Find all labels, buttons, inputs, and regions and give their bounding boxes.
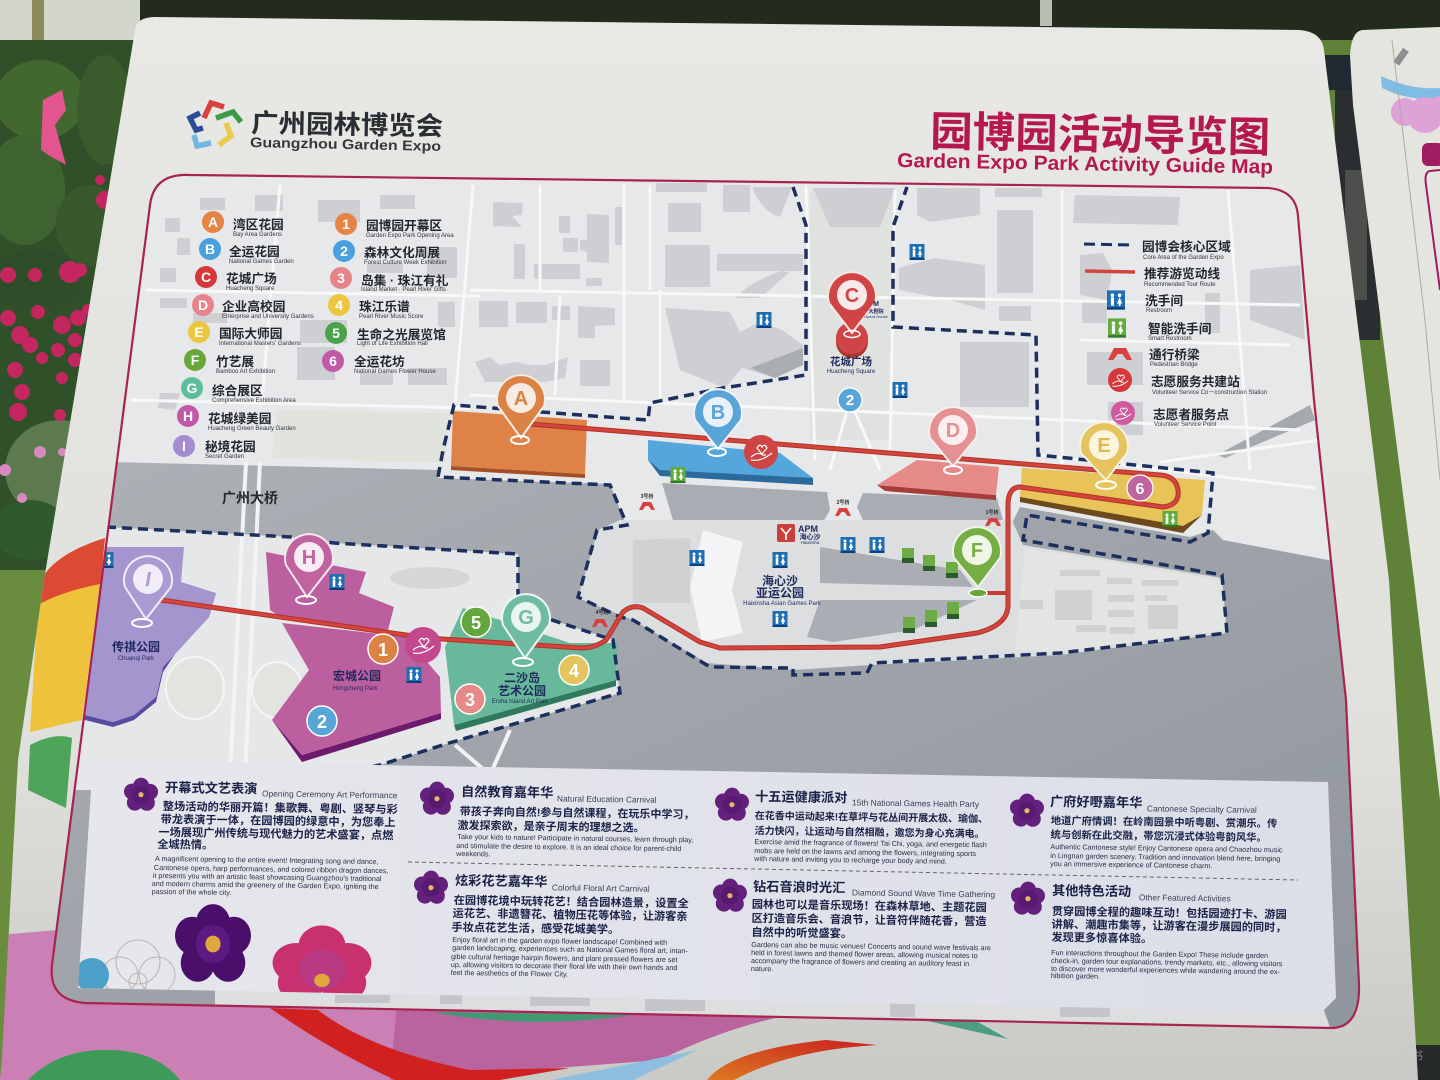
activity: health party: Exercise amid the fragrance of flowers! Tai Chi, yoga, and energetic flash [754,837,987,849]
activity: other featured: 讲解、潮趣市集等，让游客在漫步展园的同时， [1051,917,1287,934]
place labels: 大剧院 [868,308,884,315]
board decoration: colour bands [0,538,1008,1080]
legend: activities 1–6: Island Market · Pearl River Gifts [361,287,446,293]
numbered activity markers on map: 5 [471,613,481,633]
activity: natural education [419,781,695,861]
activity: diamond sound wave: nature. [751,964,773,973]
legend: map symbols: Recommended Tour Route [1144,282,1216,288]
pin E [1080,422,1128,489]
pin C: C [845,285,859,307]
legend: activities 1–6: 5 [332,325,340,341]
place labels: 花城广场 [830,355,872,368]
activity: Cantonese specialty: 广府好嘢嘉年华 [1050,793,1142,810]
numbered activity markers on map: 3 [465,690,475,710]
activity: natural education: and stimulate the desire to explore. It is an ideal choice for parent-child [456,841,681,853]
legend: activities 1–6: 生命之光展览馆 [357,327,446,342]
activity: health party: 活力快闪，让运动与自然相融，邀您为身心充满电。 [754,824,985,840]
activity: diamond sound wave [712,877,996,976]
activity: diamond sound wave: 钻石音浪时光汇 [753,878,845,895]
place labels: Opera House [864,314,889,319]
volunteer icons on map [405,435,778,663]
east island surface [1015,548,1225,652]
pin B: B [711,402,725,424]
logo text: 广州园林博览会 [251,108,443,141]
activity: Cantonese specialty: you an immersive experience of Cantonese charm. [1050,859,1212,870]
activity: other featured [1010,881,1287,983]
activity: other featured: Other Featured Activities [1139,892,1231,903]
activity: natural education: Take your kids to nature! Participate in natural courses, learn through play, [457,832,693,844]
legend: gardens A–I: Huacheng Green Beauty Garden [208,426,296,432]
activity: other featured: 发现更多惊喜体验。 [1051,930,1152,945]
map panel [40,170,1375,1040]
legend: gardens A–I: 花城绿美园 [208,411,271,426]
title: 园博园活动导览图 [930,108,1271,161]
pink wrapped sculpture [41,90,66,165]
activity: health party: 15th National Games Health Party [852,797,980,809]
legend: gardens A–I: A [208,214,218,230]
legend: activities 1–6: 6 [329,353,337,369]
activity: diamond sound wave: 自然中的听觉盛宴。 [751,925,852,940]
legend: map symbols: 园博会核心区域 [1142,239,1231,254]
bridge labels: 3号桥 [641,493,653,500]
activity: other featured: check-in, garden tour explanations, trendy markets, etc., allowing visitors [1051,956,1283,968]
legend: gardens A–I: Huacheng Square [226,286,275,292]
legend: gardens A–I: 综合展区 [212,383,263,398]
activity: opening ceremony: Opening Ceremony Art Performance [262,788,398,800]
zone I: Secret Garden [77,547,216,727]
legend: activities 1–6: 岛集 · 珠江有礼 [361,273,449,288]
activity: floral art: feel the aesthetics of the Flower City. [451,968,568,979]
place labels: Hongcheng Park [333,686,378,692]
place labels: 广州大桥 [222,490,278,506]
title [897,108,1273,179]
legend: activities 1–6: National Games Flower House [354,369,436,375]
legend: gardens A–I: Bay Area Gardens [233,232,282,238]
place labels: Ersha Island Art Park [492,699,549,705]
legend: gardens A–I: G [187,380,198,396]
activity: natural education: 自然教育嘉年华 [461,783,553,800]
legend: map symbols: Core Area of the Garden Expo [1143,255,1224,261]
activity: Cantonese specialty [1009,792,1284,871]
place labels: Huacheng Square [827,369,876,375]
logo mark [190,103,241,146]
activity: opening ceremony: it presents you with an artistic feast showcasing Guangzhou's traditional [153,871,382,883]
legend: gardens A–I: Secret Garden [205,454,244,460]
recommended tour route [161,424,1178,648]
pin I [124,556,172,627]
activity: natural education: 激发探索欲，是亲子周末的理想之选。 [457,818,645,835]
neighbouring sign board [1350,27,1440,800]
pin G [502,594,550,666]
numbered activity markers on map: 6 [1136,481,1145,498]
legend: activities 1–6: 珠江乐谱 [359,299,410,314]
numbered activity markers on map: 2 [846,392,854,409]
pin B [694,389,742,456]
pin D: D [946,420,960,442]
activity: Cantonese specialty: Authentic Cantonese style! Enjoy Cantonese opera and Chaozhou music [1050,842,1283,854]
activity: Cantonese specialty: 地道广府情调！在岭南园景中听粤剧、赏潮乐。传 [1051,814,1277,830]
green exhibition markers [902,548,959,633]
pin I: I [145,569,151,591]
legend: gardens A–I: H [183,408,193,424]
legend: gardens A–I: 全运花园 [229,244,280,259]
legend: gardens A–I: 花城广场 [226,271,277,286]
east island buildings [1020,570,1178,634]
legend: gardens A–I: International Masters' Gardens [219,341,301,347]
pin A: A [514,388,528,410]
pin D [929,407,977,474]
legend: activities 1–6 [322,213,454,375]
bridge labels: 1号桥 [986,509,998,516]
activity: Cantonese specialty: in Lingnan garden scenery. Tradition and innovation blend here, bringing [1050,851,1280,863]
legend: activities 1–6: 4 [335,297,343,313]
activity: other featured: hibition garden. [1051,971,1100,981]
gap between boards [1325,55,1385,90]
zone E: International Masters' Gardens [1020,468,1205,533]
place labels: 传祺公园 [112,639,160,654]
zone H: Huacheng Green Beauty Garden [266,552,394,630]
activity: floral art: 运花艺、非遗簪花、植物压花等体验，让游客亲 [453,906,688,923]
place labels: Haixinsha Asian Games Park [743,601,822,607]
legend: gardens A–I: Bamboo Art Exhibition [216,369,275,375]
activity: Cantonese specialty: Cantonese Specialty Carnival [1147,803,1257,815]
activity: floral art: 炫彩花艺嘉年华 [455,872,547,889]
plaza green tint [810,190,895,440]
watermark: 小红书 [1387,1048,1423,1063]
legend: map symbols [1084,239,1267,428]
activity: Cantonese specialty: 统与创新在此交融，帯您沉浸式体验粤韵风华。 [1051,828,1267,844]
activity: natural education: weekends. [455,849,491,858]
activity: floral art: Enjoy floral art in the garden expo flower landscape! Combined with [452,935,667,947]
zone G: Comprehensive Exhibition Area [445,608,618,731]
legend: gardens A–I: C [201,269,211,285]
activity: opening ceremony: 全城热情。 [157,837,213,852]
pin H [285,534,333,604]
numbered activity markers on map: 1 [378,640,388,660]
activity: health party: with nature and inviting you to recharge your body and mind. [753,854,947,866]
activity: opening ceremony: and modern charms amid the greenery of the Garden Expo, igniting the [152,879,379,891]
activity: health party: 十五运健康派对 [755,788,847,805]
activity: floral art: gible cultural heritage hairpin flowers, and plant pressed flowers are set [451,952,678,964]
activity: other featured: 贯穿园博全程的趣味互动！包括园迹打卡、游园 [1052,904,1287,921]
activity: diamond sound wave: held in forest lawns and themed flower areas, allowing musical notes to [751,948,978,960]
place labels: 宏城公园 [333,668,381,683]
activity: diamond sound wave: Diamond Sound Wave Time Gathering [852,887,995,899]
legend: map symbols: 通行桥梁 [1149,347,1200,362]
activity: opening ceremony: passion of the whole city. [152,887,231,897]
legend: map symbols: Smart Restroom [1148,336,1192,342]
legend: activities 1–6: 1 [342,216,350,232]
city blocks [158,183,1315,458]
pin H: H [302,547,316,569]
place labels: Chuanqi Park [118,656,155,662]
activity: other featured: Fun interactions throughout the Garden Expo! These include garden [1051,948,1268,960]
numbered activity markers on map: 2 [317,712,327,732]
legend: activities 1–6: Forest Culture Week Exhibition [364,260,447,266]
place labels: 亚运公园 [756,586,804,600]
legend: map symbols: Volunteer Service Point [1154,422,1217,428]
zone D: Enterprise and University Gardens [877,460,999,500]
legend: gardens A–I: Comprehensive Exhibition Area [212,398,296,404]
legend: activities 1–6: Pearl River Music Score [359,314,424,320]
core area dashed boundary [106,187,1227,775]
place labels: M [873,301,879,308]
bridge labels [596,493,998,616]
activity: floral art: up, allowing visitors to decorate their floral life with their own hands and [451,960,677,972]
pin G: G [518,607,534,629]
central island land [578,520,1227,670]
legend: gardens A–I: 企业高校园 [222,299,285,314]
lakes by Haixinsha [662,483,830,520]
activity: floral art: garden landscaping, experiences such as National Games floral art, intan- [452,943,688,955]
legend: map symbols: 志愿服务共建站 [1151,374,1240,389]
legend: map symbols: 推荐游览动线 [1144,266,1220,281]
legend: activities 1–6: 全运花坊 [354,354,405,369]
activity: other featured: to discover more wonderful experiences while wandering around the ex- [1051,964,1281,976]
legend: gardens A–I: National Games Garden [229,259,294,265]
legend: activities 1–6: 2 [340,243,348,259]
legend: map symbols: 志愿者服务点 [1153,407,1229,422]
bridge and ramps [230,462,510,775]
legend: gardens A–I: B [205,241,215,257]
place labels [112,301,889,705]
pin C [828,272,876,358]
place labels: 海心沙 [762,573,798,588]
activity: opening ceremony: 开幕式文艺表演 [165,779,257,796]
numbered activity markers on map: 4 [569,661,579,681]
activity: health party [714,787,989,866]
place labels: 二沙岛 [504,670,540,685]
logo [190,103,443,154]
activity: natural education: 带孩子奔向自然!参与自然课程，在玩乐中学习， [460,804,695,821]
green park [272,410,450,463]
logo: Guangzhou Garden Expo [250,134,441,154]
activity: diamond sound wave: 园林也可以是音乐现场！在森林草地、主题花园 [752,897,987,914]
activity: opening ceremony: 带龙表演于一体，在园博园的绿意中，为您奉上 [161,812,396,829]
activity: diamond sound wave: Gardens can also be music venues! Concerts and sound wave festivals are [751,940,991,952]
zone A: Bay Area Gardens [451,411,587,478]
legend: activities 1–6: Light of Life Exhibition Hall [357,341,428,347]
place labels: APM [798,524,818,534]
activity: natural education: Natural Education Carnival [557,793,657,805]
legend: activities 1–6: 园博园开幕区 [366,218,442,233]
legend: activities 1–6: Garden Expo Park Opening Area [366,233,454,239]
restroom icons [98,244,1178,683]
bridge labels: 2号桥 [837,499,849,506]
bridge icons [592,502,1001,627]
legend: map symbols: Volunteer Service Co－construction Station [1152,390,1267,396]
legend: activities 1–6: 3 [337,270,345,286]
place labels: Haixinsha [801,540,820,545]
left park land [60,527,620,790]
activity: opening ceremony [123,777,398,899]
activity: floral art: 在园博花境中玩转花艺！结合园林造景，设置全 [454,893,690,910]
activity: other featured: 其他特色活动 [1052,882,1131,899]
activity: opening ceremony: 整场活动的华丽开篇！集歌舞、粤剧、竖琴与彩 [163,799,398,816]
activity: floral art [413,870,690,980]
place labels: 海心沙 [800,532,820,541]
legend: gardens A–I: 竹艺展 [216,354,254,369]
legend: map symbols: 洗手间 [1145,293,1183,308]
legend: gardens A–I: F [191,352,200,368]
legend: map symbols: 智能洗手间 [1148,321,1211,336]
water [40,462,1375,1030]
activities panel [75,760,1336,1012]
activity: diamond sound wave: accompany the fragrance of flowers and creating an auditory feast in [751,956,969,968]
legend: gardens A–I: Enterprise and University Gardens [222,314,314,320]
legend: gardens A–I: E [194,324,204,340]
pin A [497,375,545,444]
legend: gardens A–I: 秘境花园 [205,439,256,454]
activity: opening ceremony: Cantonese opera, harp performances, and colored ribbon dragon dances, [154,863,389,875]
legend: gardens A–I [173,211,314,460]
roads [130,185,1320,488]
pin F: F [971,540,983,562]
activity: diamond sound wave: 区打造音乐会、音浪节，让音符伴随花香，营造 [752,911,987,928]
legend: activities 1–6: 森林文化周展 [364,245,440,260]
activity: floral art: 手妆点花艺生活，感受花城美学。 [451,920,619,936]
legend: map symbols: Restroom [1146,308,1172,314]
zone B: National Games Garden [648,440,813,485]
legend: gardens A–I: D [198,297,208,313]
legend: gardens A–I: I [182,438,186,454]
island buildings [633,538,690,603]
activity: opening ceremony: 一场展现广州传统与现代魅力的艺术盛宴，点燃 [158,825,394,842]
legend: gardens A–I: 国际大师园 [219,326,282,341]
title: Garden Expo Park Activity Guide Map [897,150,1273,179]
place labels: 艺术公园 [498,683,546,698]
numbered activity markers on map [307,388,1153,736]
decorative flowers [75,904,371,1002]
legend: map symbols: Pedestrian Bridge [1150,362,1198,368]
legend: gardens A–I: 湾区花园 [233,217,284,232]
activity: health party: mobs are held on the lawns and among the flowers, integrating sports [754,846,976,858]
activity: health party: 在花香中运动起来!在草坪与花丛间开展太极、瑜伽、 [755,809,988,825]
pin F [953,527,1001,597]
pin E: E [1097,435,1111,457]
bridge labels: 4号桥 [596,609,608,616]
map frame [52,175,1359,1028]
activity: floral art: Colorful Floral Art Carnival [552,882,650,894]
activity: opening ceremony: A magnificent opening to the entire event! Integrating song and dance, [155,854,379,866]
zone: Hongcheng Park [272,623,441,762]
bottom strip of map under text panel [215,985,1331,1030]
